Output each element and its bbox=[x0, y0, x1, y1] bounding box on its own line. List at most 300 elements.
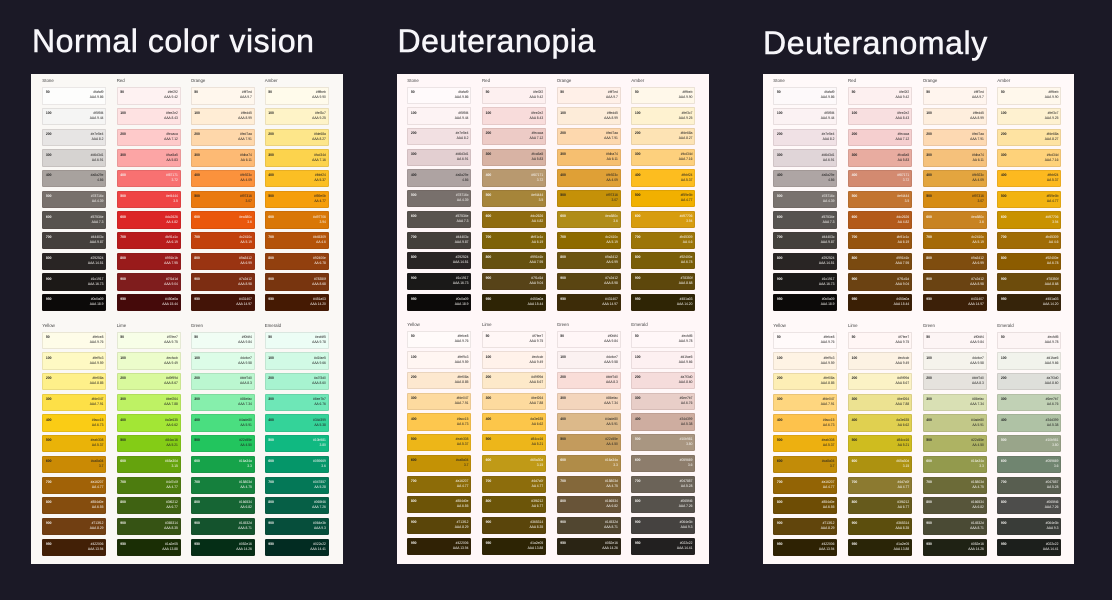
palette column: Red: 50 bbox=[120, 90, 124, 94]
panel: deuteranomaly palette bbox=[762, 74, 1074, 564]
palette column: Yellow: Yellow bbox=[407, 322, 420, 327]
palette column: Amber: AAA 7.16 bbox=[1045, 158, 1058, 162]
palette column: Red: #f87171 bbox=[531, 173, 543, 177]
palette column: Green: #f0fdf4 bbox=[608, 334, 618, 338]
palette column: Stone: 800 bbox=[777, 256, 783, 260]
palette column: Stone: #78716c bbox=[91, 194, 103, 198]
palette column: Yellow bbox=[406, 322, 471, 555]
palette column: Emerald: 200 bbox=[1001, 376, 1007, 380]
palette column: Lime: AA 6.62 bbox=[166, 423, 178, 427]
palette column: Green: #dcfce7 bbox=[240, 356, 252, 360]
palette column: Amber: #78350f bbox=[314, 277, 326, 281]
palette column: Amber: AA 4.77 bbox=[314, 199, 326, 203]
palette column: Orange: 950 bbox=[560, 297, 566, 301]
palette column: Amber: AAA 9.25 bbox=[1045, 116, 1058, 120]
palette column: Amber: #92400e bbox=[1046, 256, 1058, 260]
palette column: Stone: #44403c bbox=[91, 235, 103, 239]
palette column: Green: AA 6.82 bbox=[606, 504, 618, 508]
palette column: Emerald: AAA 8.60 bbox=[679, 380, 692, 384]
palette column: Red: AAA 8.43 bbox=[164, 116, 178, 120]
palette column: Orange: #ea580c bbox=[971, 215, 984, 219]
palette column: Lime: #d9f99d bbox=[897, 376, 909, 380]
palette column: Yellow: 500 bbox=[411, 437, 417, 441]
palette column: Orange: AA 6.11 bbox=[241, 158, 252, 162]
palette column: Stone: Stone bbox=[42, 78, 54, 83]
palette column: Orange: 500 bbox=[560, 193, 566, 197]
palette column: Red: #450a0a bbox=[165, 297, 178, 301]
palette column: Green: 500 bbox=[560, 437, 566, 441]
palette column: Orange: #ea580c bbox=[605, 214, 618, 218]
palette column: Amber: 600 bbox=[635, 214, 641, 218]
palette column: Amber: 400 bbox=[1001, 173, 1007, 177]
palette column: Orange: #fdba74 bbox=[240, 153, 252, 157]
palette column: Red: AAA 8.43 bbox=[529, 116, 543, 120]
palette column: Green: #16a34a bbox=[605, 458, 618, 462]
palette column: Emerald: AA 5.28 bbox=[314, 485, 326, 489]
palette column: Green: AA 4.75 bbox=[240, 485, 252, 489]
palette column: Amber: 950 bbox=[635, 297, 641, 301]
palette column: Lime: #3f6212 bbox=[897, 500, 909, 504]
palette column: Yellow: 900 bbox=[46, 521, 52, 525]
palette column: Yellow: AA 4.77 bbox=[92, 485, 103, 489]
palette column: Emerald: AAA 8.60 bbox=[1045, 381, 1058, 385]
palette column: Emerald: AA 5.38 bbox=[681, 422, 692, 426]
palette column: Orange: #fed7aa bbox=[240, 132, 252, 136]
palette column: Emerald: 300 bbox=[635, 396, 641, 400]
palette column: Green: 700 bbox=[194, 480, 200, 484]
palette column: Amber: 500 bbox=[268, 194, 274, 198]
palette column: Lime: AAA 9.49 bbox=[895, 361, 909, 365]
palette column: Lime: AA 4.77 bbox=[166, 485, 178, 489]
palette column: Stone: #fafaf9 bbox=[93, 90, 103, 94]
palette column: Amber: AAA 7.16 bbox=[312, 158, 326, 162]
palette column: Yellow: AA 6.73 bbox=[92, 423, 103, 427]
palette column: Yellow: #ca8a04 bbox=[822, 459, 834, 463]
palette column: Stone: AA 6.91 bbox=[823, 158, 834, 162]
palette column: Amber: 500 bbox=[1001, 194, 1007, 198]
palette column: Orange: 700 bbox=[560, 235, 566, 239]
palette column: Stone: AAA 14.51 bbox=[453, 260, 468, 264]
palette column: Red: 600 bbox=[486, 214, 491, 218]
palette column: Green: Green bbox=[191, 323, 203, 328]
palette column: Lime: 800 bbox=[120, 500, 126, 504]
palette column: Amber: 600 bbox=[1001, 215, 1007, 219]
palette column: Yellow: 50 bbox=[777, 335, 781, 339]
palette column: Stone: 100 bbox=[777, 111, 783, 115]
palette column: Lime: 500 bbox=[120, 438, 126, 442]
palette column: Amber: #fbbf24 bbox=[315, 173, 326, 177]
palette column: Red: #7f1d1d bbox=[897, 277, 909, 281]
palette column: Yellow: 3.7 bbox=[830, 464, 834, 468]
palette column: Yellow: 800 bbox=[411, 499, 417, 503]
palette column: Yellow: AA 6.55 bbox=[457, 504, 468, 508]
palette column: Yellow: 700 bbox=[777, 480, 783, 484]
palette column: Lime: 600 bbox=[852, 459, 857, 463]
palette column: Stone: #57534e bbox=[456, 214, 468, 218]
palette column: Red: #fef2f2 bbox=[899, 90, 909, 94]
palette column: Red: 900 bbox=[486, 276, 491, 280]
palette column: Stone: 50 bbox=[46, 90, 50, 94]
palette column: Orange: AAA 9.7 bbox=[606, 95, 618, 99]
palette column: Green: 200 bbox=[194, 376, 200, 380]
palette column: Lime: 3.15 bbox=[171, 464, 178, 468]
palette column: Orange: #c2410c bbox=[605, 235, 618, 239]
palette column: Stone: #44403c bbox=[822, 235, 834, 239]
palette column: Stone: 4.86 bbox=[97, 178, 103, 182]
palette column: Red: #7f1d1d bbox=[166, 277, 178, 281]
palette column: Lime: #365314 bbox=[165, 521, 178, 525]
palette column: Orange: AAA 7.91 bbox=[970, 137, 984, 141]
palette column: Orange: #ea580c bbox=[239, 215, 252, 219]
palette column: Stone: AA 6.91 bbox=[457, 157, 468, 161]
palette column: Red: #ef4444 bbox=[897, 194, 909, 198]
palette column: Stone: AAA 9.87 bbox=[821, 240, 834, 244]
palette column: Lime: AAA 9.75 bbox=[164, 340, 178, 344]
palette column: Orange: AAA 9.7 bbox=[972, 95, 984, 99]
palette column: Emerald: 600 bbox=[268, 459, 274, 463]
palette column: Yellow: #854d0e bbox=[822, 500, 834, 504]
palette column: Orange: 400 bbox=[560, 173, 566, 177]
palette column: Orange: AAA 8.99 bbox=[604, 116, 618, 120]
palette column: Green: AA 6.82 bbox=[240, 505, 252, 509]
palette column: Yellow: 300 bbox=[46, 397, 52, 401]
palette column: Stone: 4.86 bbox=[462, 178, 468, 182]
palette column: Red: AAA 9.42 bbox=[895, 95, 909, 99]
palette column: Amber: AAA 9.90 bbox=[679, 95, 692, 99]
palette column: Yellow: #fef08a bbox=[823, 376, 834, 380]
palette column: Stone: #1c1917 bbox=[456, 276, 468, 280]
palette column: Emerald: AAA 9.66 bbox=[1045, 361, 1058, 365]
palette column: Yellow: AAA 8.29 bbox=[90, 526, 103, 530]
palette column: Stone: AAA 9.44 bbox=[821, 116, 834, 120]
palette column: Stone: #292524 bbox=[822, 256, 834, 260]
palette column: Lime: AAA 13.88 bbox=[162, 547, 178, 551]
palette column: Stone: 100 bbox=[46, 111, 52, 115]
palette column: Green: #22c55e bbox=[239, 438, 252, 442]
palette column: Emerald: #ecfdf5 bbox=[682, 334, 692, 338]
palette column: Orange: AA 6.99 bbox=[606, 260, 618, 264]
palette column: Orange: 600 bbox=[194, 215, 200, 219]
palette column: Orange: AA 4.09 bbox=[972, 178, 984, 182]
palette column: Red: Red bbox=[848, 78, 856, 83]
palette column: Emerald: #064e3b bbox=[1046, 521, 1058, 525]
palette column: Green: 600 bbox=[560, 458, 566, 462]
palette column: Emerald: 400 bbox=[1001, 418, 1007, 422]
palette column: Yellow bbox=[772, 323, 837, 556]
palette column: Orange: #9a3412 bbox=[239, 256, 252, 260]
palette column: Emerald: AAA 9.3 bbox=[314, 526, 326, 530]
palette column: Red: 700 bbox=[120, 235, 126, 239]
palette column: Lime: #3f6212 bbox=[166, 500, 178, 504]
palette column: Green: 300 bbox=[926, 397, 932, 401]
palette column: Red: 400 bbox=[852, 173, 857, 177]
palette column: Stone: 950 bbox=[411, 297, 417, 301]
palette column: Emerald: #047857 bbox=[1046, 480, 1058, 484]
palette column: Lime: 700 bbox=[120, 480, 126, 484]
palette column: Yellow: #fde047 bbox=[823, 397, 834, 401]
palette column: Stone: 100 bbox=[411, 111, 417, 115]
palette column: Stone: 400 bbox=[46, 173, 52, 177]
palette column: Lime: 50 bbox=[852, 335, 855, 339]
palette column: Yellow: AA 6.55 bbox=[823, 505, 834, 509]
palette column: Amber: #b45309 bbox=[680, 235, 692, 239]
palette column: Emerald: 700 bbox=[635, 479, 641, 483]
palette column: Green: #4ade80 bbox=[605, 417, 618, 421]
palette column: Emerald: 400 bbox=[268, 418, 274, 422]
palette column: Orange: 100 bbox=[926, 111, 932, 115]
palette column: Amber: AA 5.37 bbox=[1047, 178, 1058, 182]
palette column: Lime: AA 5.21 bbox=[166, 443, 178, 447]
palette column: Stone: 400 bbox=[777, 173, 783, 177]
palette column: Green: AAA 8.71 bbox=[238, 526, 252, 530]
palette column: Green: 400 bbox=[194, 418, 200, 422]
palette column: Stone: 300 bbox=[411, 152, 417, 156]
palette column: Green: Green bbox=[557, 322, 569, 327]
palette column: Yellow: #854d0e bbox=[91, 500, 103, 504]
palette column: Orange: 800 bbox=[194, 256, 200, 260]
palette column: Amber: AAA 9.90 bbox=[312, 95, 326, 99]
palette column: Green: #166534 bbox=[239, 500, 252, 504]
palette column: Yellow: 200 bbox=[411, 375, 417, 379]
palette column: Orange: #fdba74 bbox=[606, 152, 618, 156]
palette column: Stone: 200 bbox=[46, 132, 52, 136]
palette column: Orange: 800 bbox=[926, 256, 932, 260]
palette column: Yellow: #713f12 bbox=[823, 521, 834, 525]
palette column: Red: AA 5.83 bbox=[898, 158, 909, 162]
palette column: Lime: AAA 8.35 bbox=[164, 526, 178, 530]
palette column: Red: AA 4.82 bbox=[532, 219, 543, 223]
palette column: Green: 100 bbox=[194, 356, 200, 360]
palette column: Orange: #ffedd5 bbox=[607, 111, 618, 115]
palette column: Stone: #78716c bbox=[822, 194, 834, 198]
palette column: Lime: 200 bbox=[120, 376, 126, 380]
palette column: Amber: AAA 9.25 bbox=[312, 116, 326, 120]
palette column: Red: #450a0a bbox=[896, 297, 909, 301]
palette column: Lime: 800 bbox=[486, 499, 491, 503]
palette column: Stone: 200 bbox=[411, 131, 417, 135]
palette column: Yellow: #ca8a04 bbox=[456, 458, 468, 462]
palette column: Stone: 600 bbox=[46, 215, 52, 219]
palette column: Amber bbox=[630, 78, 695, 311]
palette column: Emerald: 800 bbox=[268, 500, 274, 504]
palette column: Amber: AA 4.6 bbox=[683, 240, 692, 244]
palette column: Green: #166534 bbox=[605, 499, 618, 503]
palette column: Red: 3.72 bbox=[171, 178, 178, 182]
palette column: Emerald: AAA 9.66 bbox=[312, 361, 326, 365]
palette column: Orange: #fb923c bbox=[240, 173, 252, 177]
palette column: Orange: AA 5.19 bbox=[240, 240, 252, 244]
palette column: Green: #14532d bbox=[239, 521, 252, 525]
palette column: Red: AAA 9.04 bbox=[529, 281, 543, 285]
palette column: Amber: 3.94 bbox=[686, 219, 692, 223]
palette column: Stone: AAA 14.51 bbox=[88, 261, 103, 265]
palette column: Lime: AAA 9.75 bbox=[895, 340, 909, 344]
palette column: Emerald: 3.80 bbox=[319, 443, 326, 447]
palette column: Stone: 400 bbox=[411, 173, 417, 177]
palette column: Amber: 100 bbox=[635, 111, 641, 115]
palette column: Emerald: 500 bbox=[635, 437, 641, 441]
palette column: Lime: AAA 7.88 bbox=[529, 401, 543, 405]
palette column: Orange: 950 bbox=[926, 297, 932, 301]
palette column: Red bbox=[482, 78, 546, 311]
palette column: Emerald: #064e3b bbox=[680, 520, 692, 524]
palette column: Amber: #78350f bbox=[1047, 277, 1058, 281]
palette column: Yellow: AA 5.37 bbox=[823, 443, 834, 447]
palette column: Lime: #a3e635 bbox=[165, 418, 178, 422]
palette column: Yellow: AAA 13.94 bbox=[88, 547, 103, 551]
palette column: Stone: Stone bbox=[773, 78, 785, 83]
palette column: Yellow: #fef9c3 bbox=[824, 356, 834, 360]
palette column: Emerald: 3.6 bbox=[688, 463, 692, 467]
palette column: Emerald: 300 bbox=[1001, 397, 1007, 401]
palette column: Lime: #4d7c0f bbox=[166, 480, 178, 484]
title: Normal color vision: Normal color vision bbox=[32, 23, 315, 59]
palette column: Stone: Stone bbox=[407, 78, 419, 83]
palette column: Amber: #fcd34d bbox=[314, 153, 326, 157]
palette column: Stone: #57534e bbox=[91, 215, 103, 219]
palette column: Stone: #d6d3d1 bbox=[822, 153, 834, 157]
palette column: Yellow: #a16207 bbox=[91, 480, 103, 484]
palette column: Red: 900 bbox=[852, 277, 857, 281]
palette column: Stone: AA 4.39 bbox=[92, 199, 103, 203]
palette column: Red: 200 bbox=[486, 131, 491, 135]
palette column: Orange: 200 bbox=[194, 132, 200, 136]
palette column: Amber: AA 6.78 bbox=[681, 260, 692, 264]
palette column: Amber: #fef3c7 bbox=[682, 111, 692, 115]
palette column: Amber: #92400e bbox=[313, 256, 326, 260]
palette column: Amber: 300 bbox=[1001, 153, 1007, 157]
palette column: Green: #15803d bbox=[239, 480, 252, 484]
palette column: Green: 950 bbox=[560, 541, 566, 545]
palette column: Lime: 400 bbox=[486, 417, 491, 421]
palette column: Amber: 900 bbox=[1001, 277, 1007, 281]
palette column: Lime: 300 bbox=[852, 397, 857, 401]
palette column: Red: AAA 7.12 bbox=[529, 136, 543, 140]
palette column: Amber: 50 bbox=[635, 90, 639, 94]
palette column: Green: #14532d bbox=[605, 520, 618, 524]
palette column: Red: #fecaca bbox=[898, 132, 909, 136]
palette column: Amber: 700 bbox=[635, 235, 641, 239]
palette column: Stone: AAA 7.3 bbox=[457, 219, 468, 223]
palette column: Red: 300 bbox=[486, 152, 491, 156]
palette column: Orange: 3.6 bbox=[979, 220, 984, 224]
palette column: Orange: AAA 8.99 bbox=[970, 116, 984, 120]
palette column: Stone: AAA 18.9 bbox=[455, 302, 468, 306]
palette column: Yellow: 500 bbox=[777, 438, 783, 442]
palette column: Orange: 300 bbox=[926, 153, 932, 157]
palette column: Amber: #fde68a bbox=[1047, 132, 1058, 136]
palette column: Green: #052e16 bbox=[239, 542, 252, 546]
palette column: Green: #86efac bbox=[972, 397, 984, 401]
palette column: Lime: AA 4.77 bbox=[898, 485, 909, 489]
palette column: Lime: 600 bbox=[120, 459, 126, 463]
palette column: Emerald: 3.80 bbox=[1052, 443, 1058, 447]
palette column: Emerald: AAA 9.78 bbox=[312, 340, 326, 344]
palette column: Amber: AAA 8.68 bbox=[1045, 282, 1058, 286]
palette column: Yellow: 400 bbox=[777, 418, 783, 422]
palette column: Yellow: #422006 bbox=[822, 542, 834, 546]
palette column: Red: AA 5.83 bbox=[532, 157, 543, 161]
palette column: Amber: #fbbf24 bbox=[681, 173, 692, 177]
palette column: Yellow: #422006 bbox=[91, 542, 103, 546]
palette column: Orange: AAA 8.98 bbox=[238, 282, 252, 286]
palette column: Amber: #fbbf24 bbox=[1047, 173, 1058, 177]
palette column: Orange: AAA 9.7 bbox=[240, 95, 252, 99]
palette column: Green: AAA 8.71 bbox=[970, 526, 984, 530]
palette column: Stone: #e7e5e4 bbox=[822, 132, 834, 136]
palette column: Lime: 700 bbox=[486, 479, 491, 483]
palette column: Amber: 950 bbox=[1001, 297, 1007, 301]
palette column: Red: AAA 7.95 bbox=[529, 260, 543, 264]
palette column: Stone: 600 bbox=[411, 214, 417, 218]
palette column: Green: #86efac bbox=[240, 397, 252, 401]
palette column: Red: 3.72 bbox=[903, 178, 909, 182]
palette column: Red: 900 bbox=[120, 277, 126, 281]
palette column: Lime: #65a30d bbox=[165, 459, 178, 463]
palette column: Emerald: #34d399 bbox=[313, 418, 326, 422]
palette column: Orange: #fff7ed bbox=[608, 90, 618, 94]
palette column: Orange: Orange bbox=[191, 78, 205, 83]
palette column: Lime: #f7fee7 bbox=[532, 334, 543, 338]
palette column: Amber: AAA 14.20 bbox=[677, 302, 692, 306]
palette column: Emerald: #a7f3d0 bbox=[1047, 376, 1058, 380]
palette column: Green: AA 5.91 bbox=[240, 423, 252, 427]
palette column: Stone: AAA 8.2 bbox=[457, 136, 468, 140]
palette column: Amber: 400 bbox=[635, 173, 641, 177]
palette column: Green: AAA 8.3 bbox=[240, 381, 252, 385]
palette column: Yellow: #713f12 bbox=[457, 520, 468, 524]
palette column: Lime: AAA 9.75 bbox=[529, 339, 543, 343]
palette column: Yellow: #713f12 bbox=[92, 521, 103, 525]
palette column: Orange: AAA 14.97 bbox=[968, 302, 984, 306]
palette column: Emerald: #6ee7b7 bbox=[680, 396, 692, 400]
palette column: Yellow: 700 bbox=[411, 479, 417, 483]
palette column: Emerald: #d1fae5 bbox=[314, 356, 326, 360]
palette column: Red: AAA 7.12 bbox=[164, 137, 178, 141]
palette column: Yellow: #fefce8 bbox=[824, 335, 834, 339]
palette column: Lime: 50 bbox=[486, 334, 489, 338]
palette column: Orange: AA 4.09 bbox=[240, 178, 252, 182]
palette column: Red bbox=[848, 78, 912, 311]
palette column: Emerald: 50 bbox=[635, 334, 639, 338]
palette column: Orange: #fb923c bbox=[606, 173, 618, 177]
palette column: Stone: AAA 9.44 bbox=[90, 116, 103, 120]
palette column: Red: 800 bbox=[852, 256, 857, 260]
palette column: Stone: #e7e5e4 bbox=[91, 132, 103, 136]
palette column: Green: AA 5.91 bbox=[606, 422, 618, 426]
palette column: Emerald: Emerald bbox=[631, 322, 648, 327]
palette column: Emerald: AAA 14.41 bbox=[310, 547, 326, 551]
palette column: Orange: AA 5.19 bbox=[972, 240, 984, 244]
palette column: Yellow bbox=[42, 323, 106, 556]
palette column: Amber: #451a03 bbox=[1046, 297, 1058, 301]
palette column: Amber: 200 bbox=[1001, 132, 1007, 136]
palette column: Green: AAA 7.34 bbox=[238, 402, 252, 406]
palette column: Stone: #1c1917 bbox=[822, 277, 834, 281]
palette column: Orange bbox=[556, 78, 621, 311]
palette column: Orange: Orange bbox=[923, 78, 937, 83]
panel: normal color vision palette bbox=[31, 74, 343, 564]
palette column: Yellow: 800 bbox=[777, 500, 783, 504]
palette column: Green: 950 bbox=[194, 542, 200, 546]
palette column: Lime: 200 bbox=[852, 376, 857, 380]
palette column: Stone: AAA 7.3 bbox=[823, 220, 834, 224]
palette column: Emerald: 900 bbox=[635, 520, 641, 524]
palette column: Amber: #b45309 bbox=[1046, 235, 1058, 239]
palette column: Red: 800 bbox=[120, 256, 126, 260]
palette column: Lime: 700 bbox=[852, 480, 857, 484]
palette column: Stone: AAA 7.3 bbox=[92, 220, 103, 224]
